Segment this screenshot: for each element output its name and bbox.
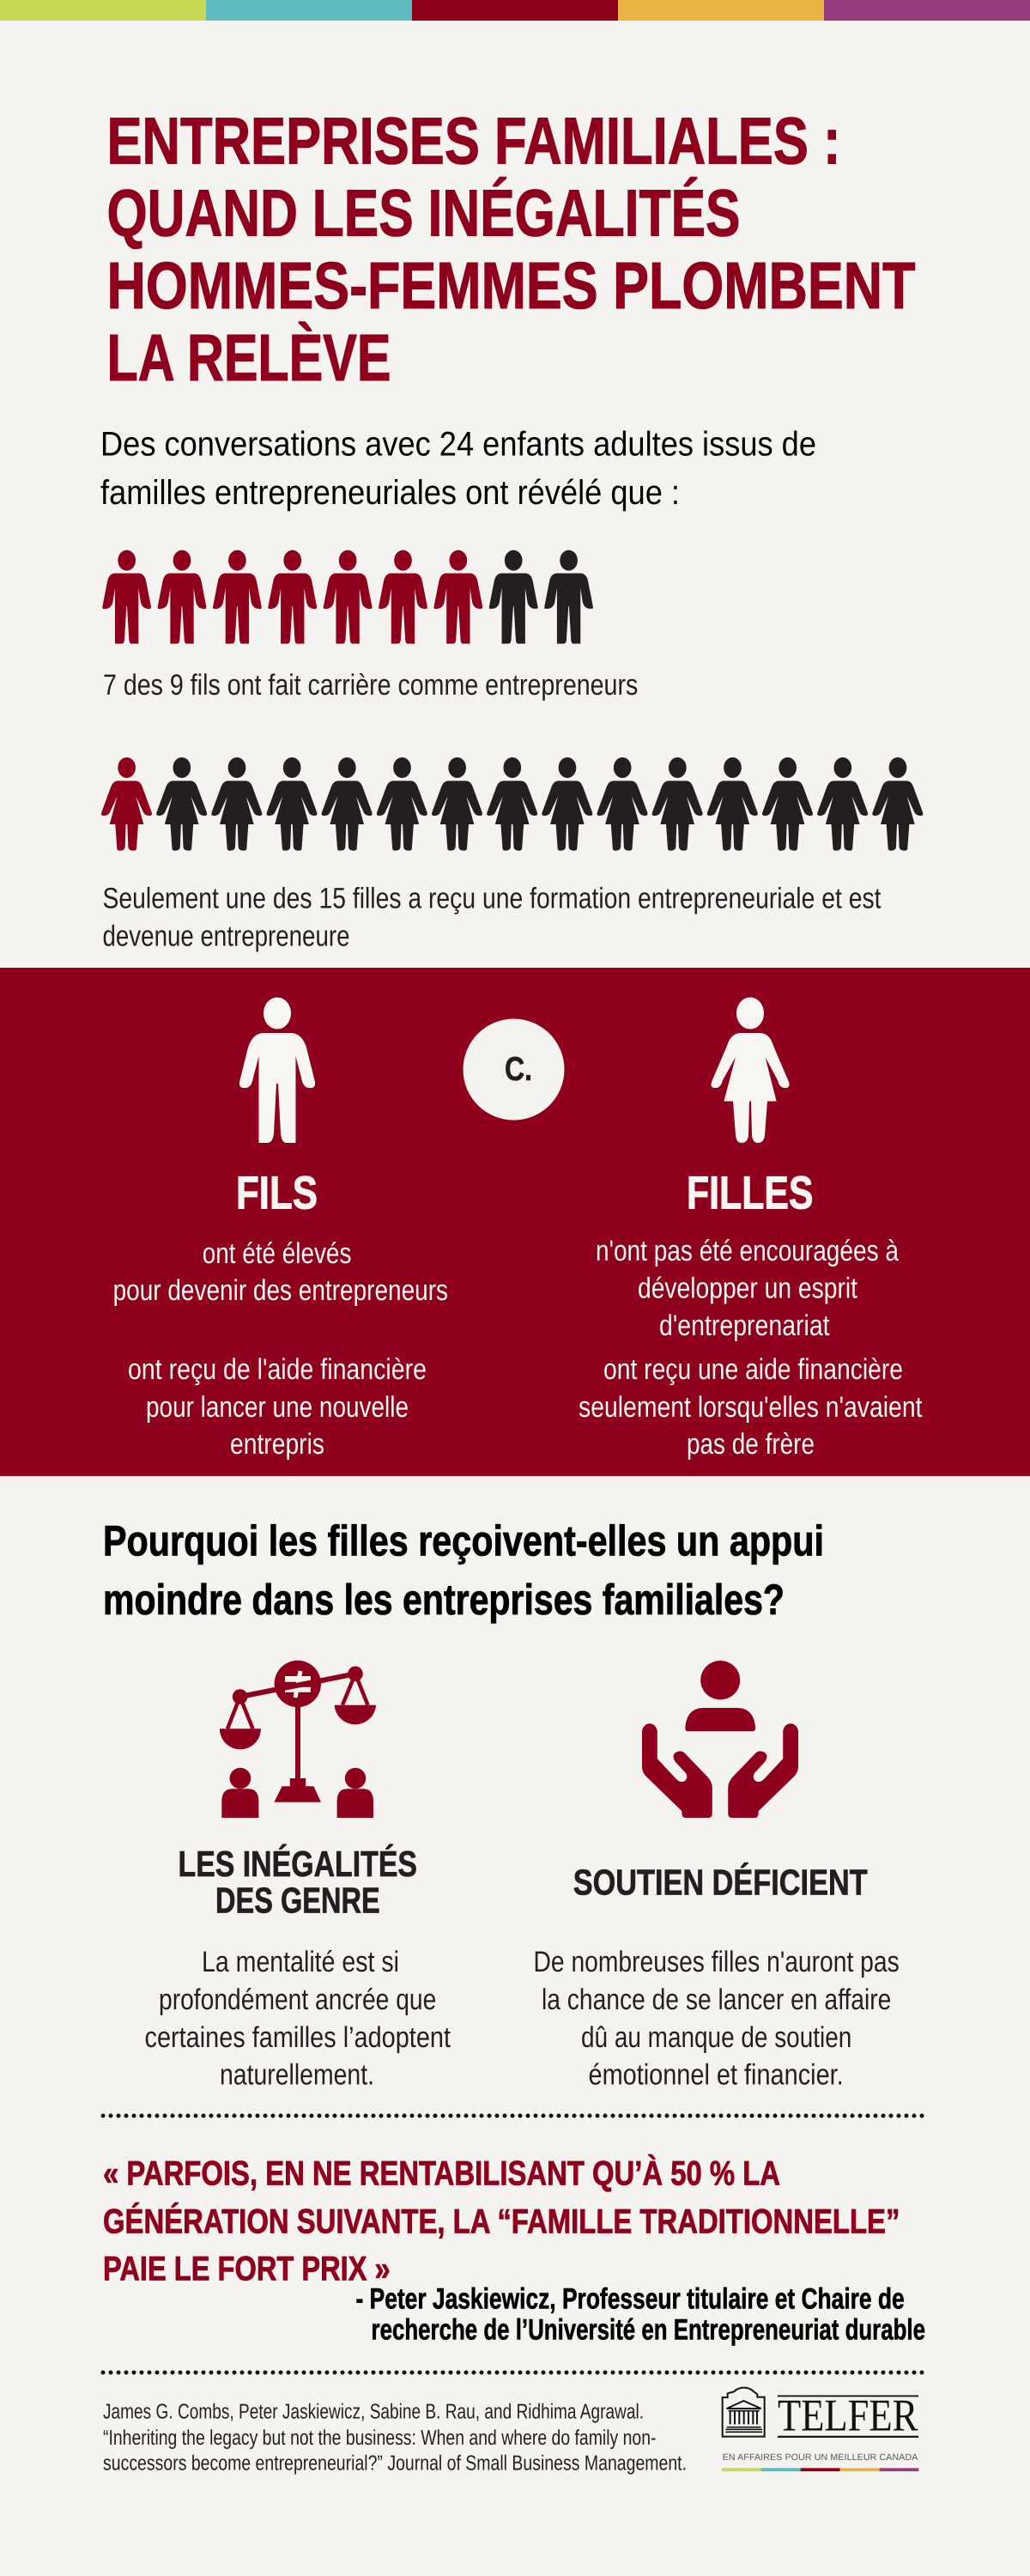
panel: sons versus daughters <box>0 968 1030 1476</box>
logo building <box>723 2388 765 2437</box>
sons who became entrepreneurs <box>102 550 482 644</box>
section heading: why: moindre dans les entreprises familiales? <box>103 1576 785 1624</box>
caption: daughters <box>103 882 882 953</box>
text: daughters financing: ont reçu une aide financière <box>603 1353 903 1386</box>
caption: daughters: Seulement une des 15 filles a reçu une formation entrepreneuriale et est <box>103 882 882 914</box>
text: daughters upbringing <box>596 1235 899 1342</box>
column heading: support: SOUTIEN DÉFICIENT <box>573 1862 868 1903</box>
title: QUAND LES INÉGALITÉS <box>106 177 740 251</box>
column heading: inequalities: LES INÉGALITÉS <box>179 1844 417 1884</box>
icon: supporting hands <box>642 1661 798 1818</box>
text: daughters financing <box>579 1353 923 1461</box>
text: sons financing <box>128 1353 427 1461</box>
pictogram row: daughters <box>101 757 923 851</box>
heading: FILS: FILS <box>236 1168 318 1219</box>
text: daughters upbringing: n'ont pas été encouragées à <box>596 1235 899 1267</box>
column text: support: De nombreuses filles n'auront pas <box>534 1946 900 1978</box>
text: daughters financing: seulement lorsqu'elles n'avaient <box>579 1391 923 1424</box>
text: sons financing: entrepris <box>230 1428 324 1461</box>
quote attribution <box>355 2283 925 2347</box>
heading: FILLES: FILLES <box>687 1168 814 1219</box>
source citation: “Inheriting the legacy but not the business: When and where do family non- <box>103 2427 656 2450</box>
icon: daughter <box>711 998 790 1143</box>
title <box>106 105 915 395</box>
top colour stripe <box>0 0 1030 21</box>
versus badge: C. <box>505 1051 532 1088</box>
column text: inequalities: profondément ancrée que <box>159 1984 436 2016</box>
source citation: James G. Combs, Peter Jaskiewicz, Sabine B. Rau, and Ridhima Agrawal. <box>103 2401 644 2424</box>
section heading: why: Pourquoi les filles reçoivent-elles un appui <box>103 1517 824 1565</box>
title: LA RELÈVE <box>106 321 391 395</box>
other daughters <box>156 757 923 851</box>
text: daughters financing: pas de frère <box>687 1428 815 1461</box>
quote: PAIE LE FORT PRIX » <box>103 2250 391 2287</box>
column text: support <box>534 1946 900 2091</box>
column text: support: émotionnel et financier. <box>589 2058 844 2091</box>
icon: son <box>239 998 315 1143</box>
caption: sons: 7 des 9 fils ont fait carrière comme entrepreneurs <box>103 669 638 702</box>
source citation: successors become entrepreneurial?” Journal of Small Business Management. <box>103 2452 687 2476</box>
title: ENTREPRISES FAMILIALES : <box>106 105 841 179</box>
column text: support: la chance de se lancer en affaire <box>542 1984 891 2016</box>
logo tagline: EN AFFAIRES POUR UN MEILLEUR CANADA <box>723 2452 918 2463</box>
intro text: familles entrepreneuriales ont révélé que : <box>100 474 680 512</box>
caption: daughters: devenue entrepreneure <box>103 920 350 953</box>
icon: unequal scales <box>220 1661 376 1818</box>
pictogram row: sons <box>102 550 593 644</box>
daughter who became an entrepreneur <box>101 757 152 851</box>
text: sons upbringing: ont été élevés <box>203 1237 351 1270</box>
logo wordmark: TELFER <box>778 2391 918 2441</box>
text: sons financing: ont reçu de l'aide financière <box>128 1353 427 1386</box>
text: daughters upbringing: d'entreprenariat <box>659 1309 830 1342</box>
text: sons upbringing: pour devenir des entrepreneurs <box>113 1274 448 1307</box>
logo: Telfer <box>722 2388 918 2471</box>
column heading: inequalities: DES GENRE <box>215 1880 380 1920</box>
text: sons financing: pour lancer une nouvelle <box>146 1391 409 1424</box>
intro text <box>100 426 816 512</box>
column text: inequalities <box>144 1946 451 2091</box>
text: daughters upbringing: développer un esprit <box>638 1273 857 1305</box>
logo colour stripe <box>722 2468 918 2471</box>
column text: inequalities: certaines familles l’adoptent <box>144 2021 451 2054</box>
intro text: Des conversations avec 24 enfants adultes issus de <box>100 426 816 464</box>
column text: support: dû au manque de soutien <box>581 2021 851 2054</box>
section heading: why <box>103 1517 824 1624</box>
column text: inequalities: La mentalité est si <box>202 1946 399 1978</box>
text: sons upbringing <box>113 1237 448 1307</box>
column text: inequalities: naturellement. <box>220 2058 374 2091</box>
source citation <box>103 2401 687 2476</box>
quote: « PARFOIS, EN NE RENTABILISANT QU’À 50 % LA <box>103 2154 780 2193</box>
versus badge <box>464 1018 565 1120</box>
other sons <box>489 550 593 644</box>
column heading: inequalities <box>179 1844 417 1920</box>
quote <box>103 2154 900 2287</box>
